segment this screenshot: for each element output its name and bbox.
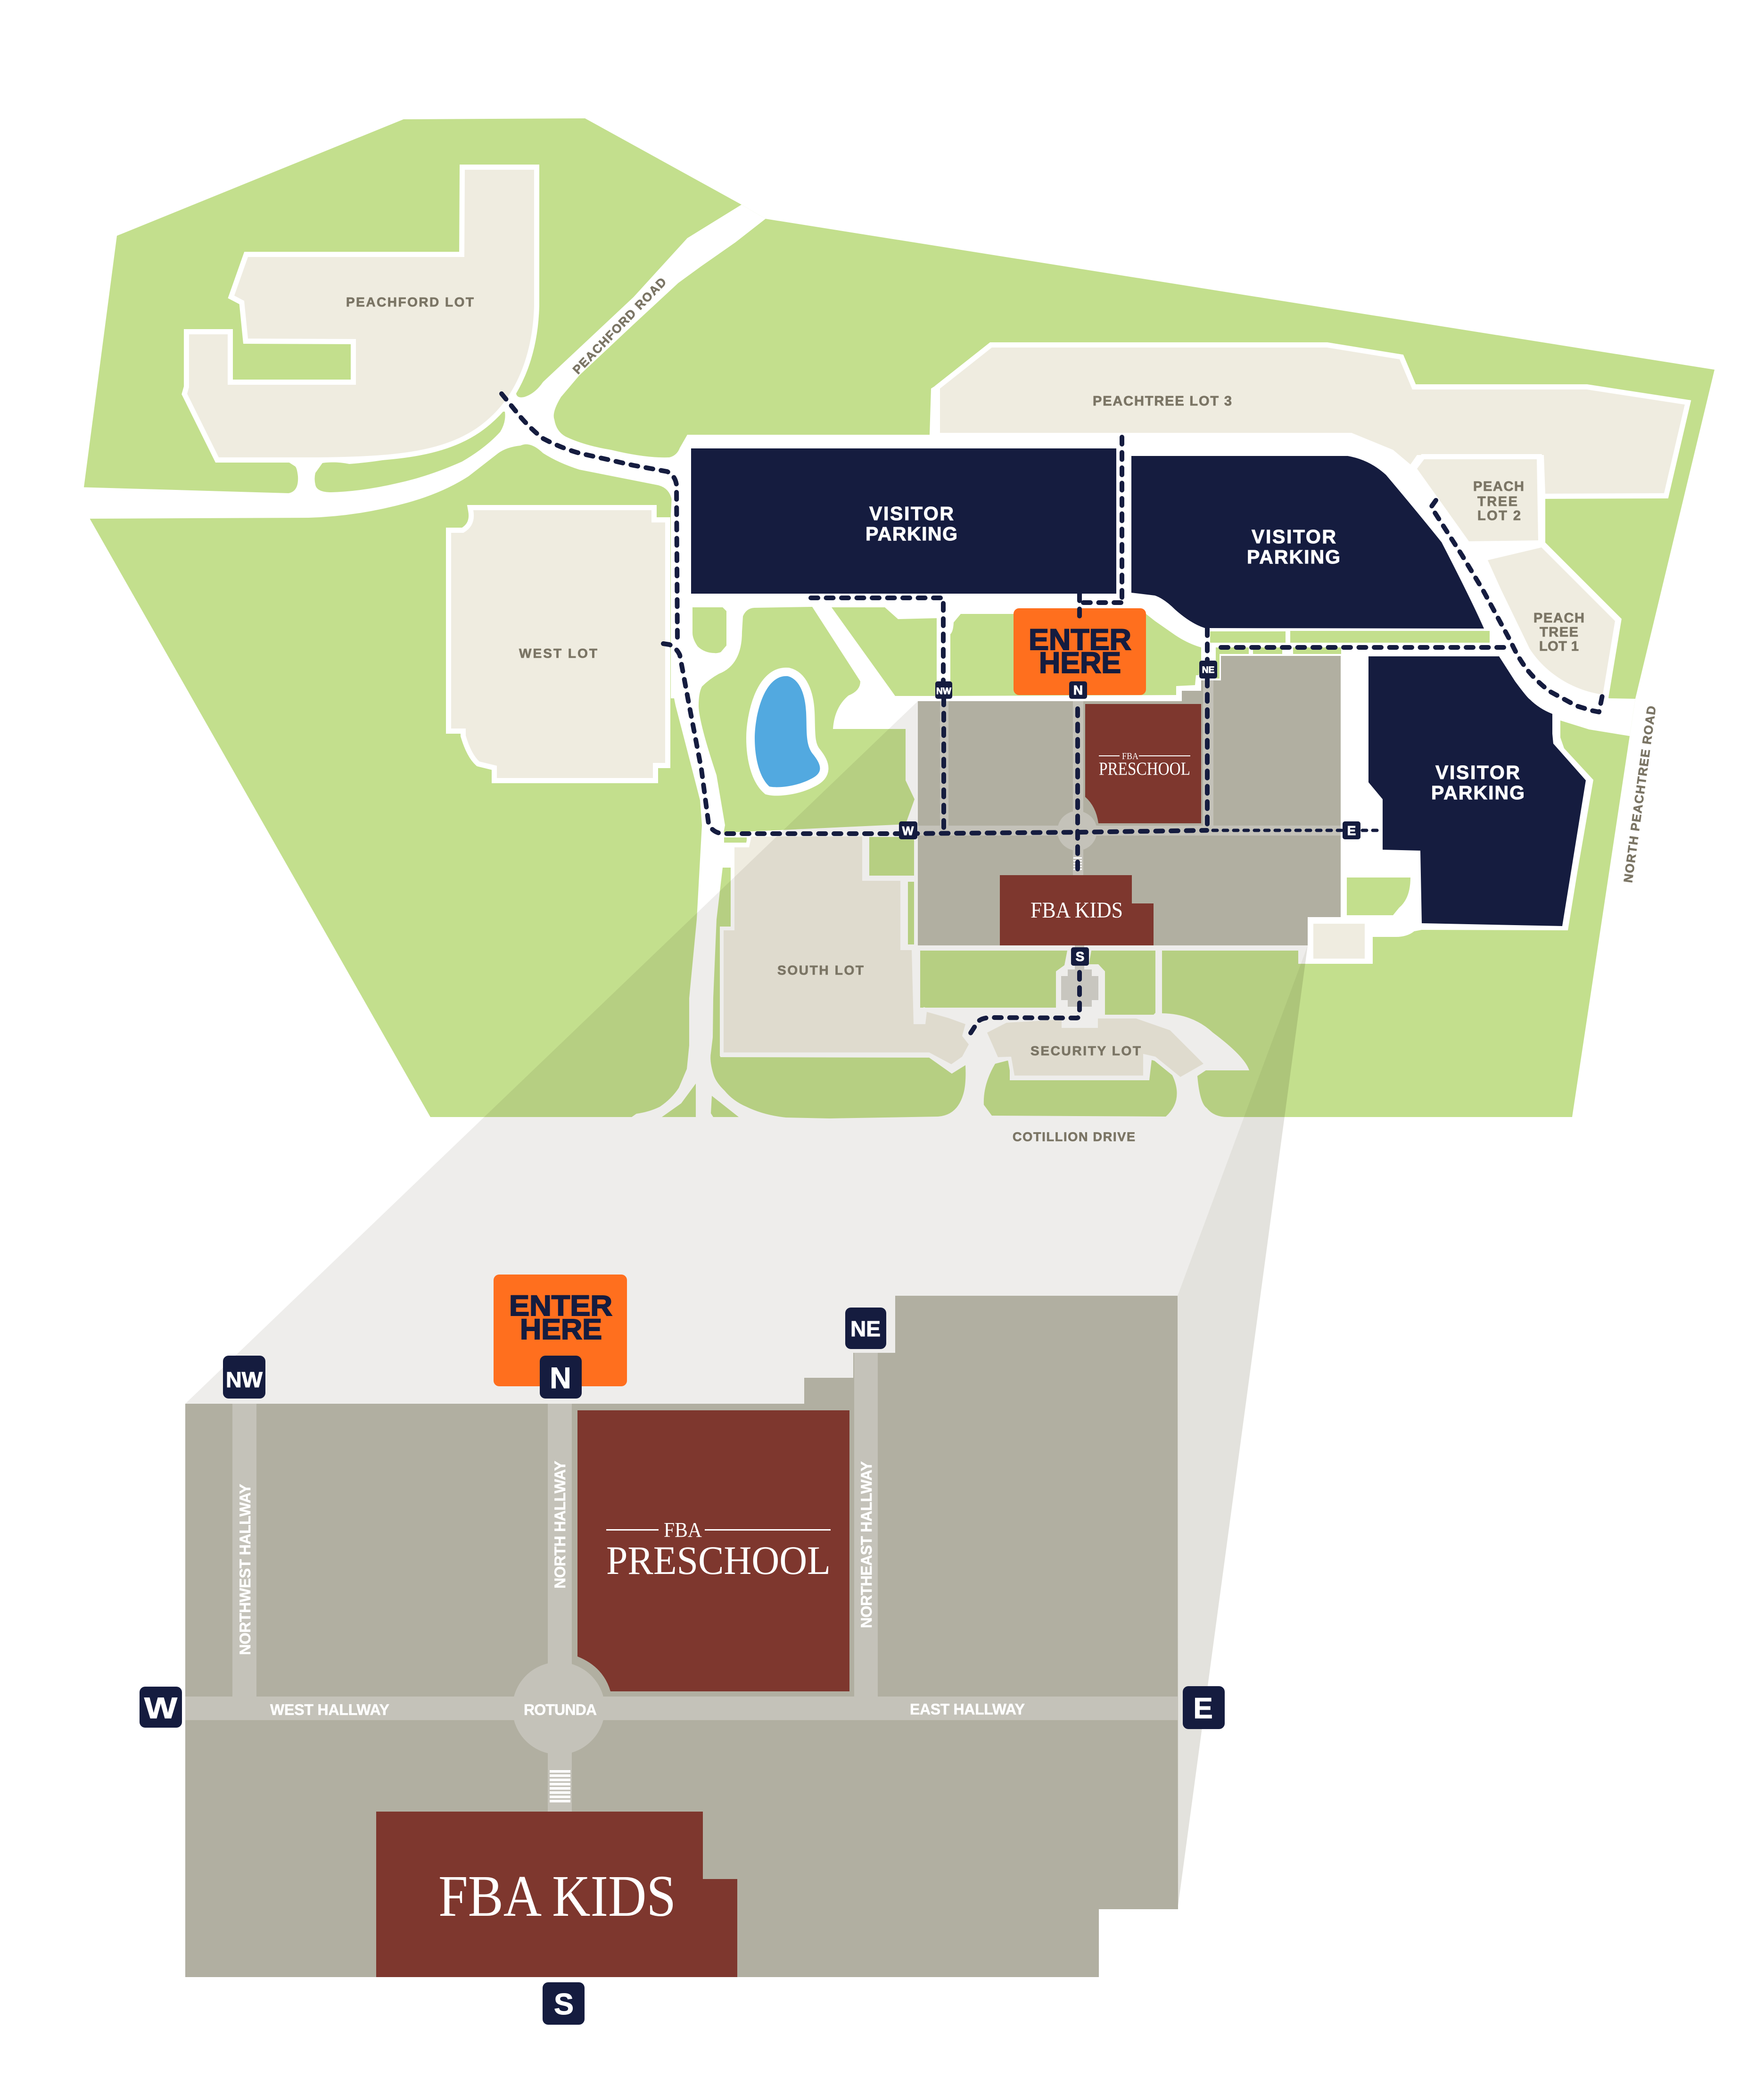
parking lot: peachtree lot 2 [1417,459,1538,541]
label: parking and road names: LOT 1 [1539,639,1579,654]
label: parking and road names: TREE [1540,625,1578,640]
callout: enter here site map: ENTER [1029,623,1131,656]
building: fba kids site map [1000,875,1154,945]
parking lot: peachtree lot 1 [1488,547,1615,695]
label: hallway names: WEST HALLWAY [270,1701,389,1718]
badges: detail plan entrances: NW [226,1367,263,1392]
parking: visitor parking north west [691,448,1116,594]
parking lot: security lot [987,1018,1203,1077]
building: detail floor plan [185,1296,1178,1977]
label: visitor parking text: PARKING [1247,546,1340,568]
building: fba kids detail: FBA KIDS [438,1864,676,1929]
parking lot: peachford lot [187,170,534,457]
badges: detail plan entrances: NE [850,1316,881,1341]
callout: enter here detail: HERE [520,1313,602,1345]
badges: site map entrances: N [1073,683,1083,697]
building: preschool site map: PRESCHOOL [1099,759,1190,779]
label: hallway names: ROTUNDA [524,1701,597,1718]
callout: enter here detail: ENTER [509,1290,612,1322]
label: parking and road names: LOT 2 [1477,508,1521,523]
label: visitor parking text: VISITOR [1435,762,1520,783]
entry plaza [1061,966,1098,1007]
building: preschool detail [577,1410,849,1691]
building: preschool site map [1085,704,1201,823]
label: hallway names: NORTH HALLWAY [552,1461,569,1589]
walking routes dashed [502,394,1603,1036]
parking lot: south lot [724,836,969,1064]
badges: site map entrances: W [902,824,914,838]
label: parking and road names: PEACH [1533,611,1584,626]
callout: enter here site map [1014,608,1146,695]
parking: visitor parking east [1368,656,1586,926]
label: parking and road names [346,275,1659,1144]
label: parking and road names: SOUTH LOT [777,963,864,977]
label: visitor parking text [866,503,1525,803]
badges: site map entrances: E [1347,823,1356,838]
badges: detail plan entrances: E [1193,1692,1213,1725]
stairs: site map [1073,857,1082,870]
badges: site map entrances: NW [936,687,951,696]
label: parking and road names: SECURITY LOT [1030,1043,1141,1058]
pond [755,676,820,787]
label: parking and road names: WEST LOT [519,646,597,661]
label: parking and road names: NORTH PEACHTREE ROAD [1621,705,1659,884]
stairs: detail plan [550,1770,570,1802]
label: visitor parking text: PARKING [866,523,957,545]
label: hallway names: NORTHEAST HALLWAY [858,1461,875,1628]
badges: site map entrances: S [1076,949,1084,964]
badges: detail plan entrances: N [550,1362,571,1395]
parking: visitor parking north east [1131,456,1484,629]
building: fba kids detail [376,1812,737,1977]
badges: detail plan entrances: W [144,1692,178,1725]
label: parking and road names: PEACH [1473,479,1524,494]
parking lot: small lot southeast of building [1313,924,1365,959]
label: parking and road names: COTILLION DRIVE [1013,1130,1135,1144]
building: site map main building [918,656,1341,949]
label: visitor parking text: VISITOR [1252,526,1336,547]
callout: enter here site map: HERE [1039,646,1121,679]
building: preschool detail: FBA [664,1518,702,1541]
label: parking and road names: TREE [1477,494,1517,509]
label: hallway names: NORTHWEST HALLWAY [237,1484,254,1655]
building: preschool site map: FBA [1122,751,1139,762]
badges: detail plan entrances [140,1308,1225,2025]
parking lot: west lot [451,510,665,778]
zoom callout wedge [185,701,1308,1909]
label: hallway names [237,1461,1025,1718]
panel: site map grounds [78,118,1715,1118]
label: visitor parking text: PARKING [1431,782,1525,803]
parking lot: peachtree lot 3 [940,348,1685,494]
callout: enter here detail [494,1275,627,1386]
badges: detail plan entrances: S [554,1988,574,2021]
badges: site map entrances [899,661,1360,966]
badges: site map entrances: NE [1202,665,1214,675]
label: parking and road names: PEACHFORD LOT [346,295,474,309]
label: hallway names: EAST HALLWAY [910,1701,1025,1718]
building: fba kids site map: FBA KIDS [1030,898,1123,923]
label: visitor parking text: VISITOR [869,503,954,524]
building: preschool detail: PRESCHOOL [606,1538,831,1583]
label: parking and road names: PEACHFORD ROAD [570,275,669,377]
label: parking and road names: PEACHTREE LOT 3 [1093,394,1232,409]
